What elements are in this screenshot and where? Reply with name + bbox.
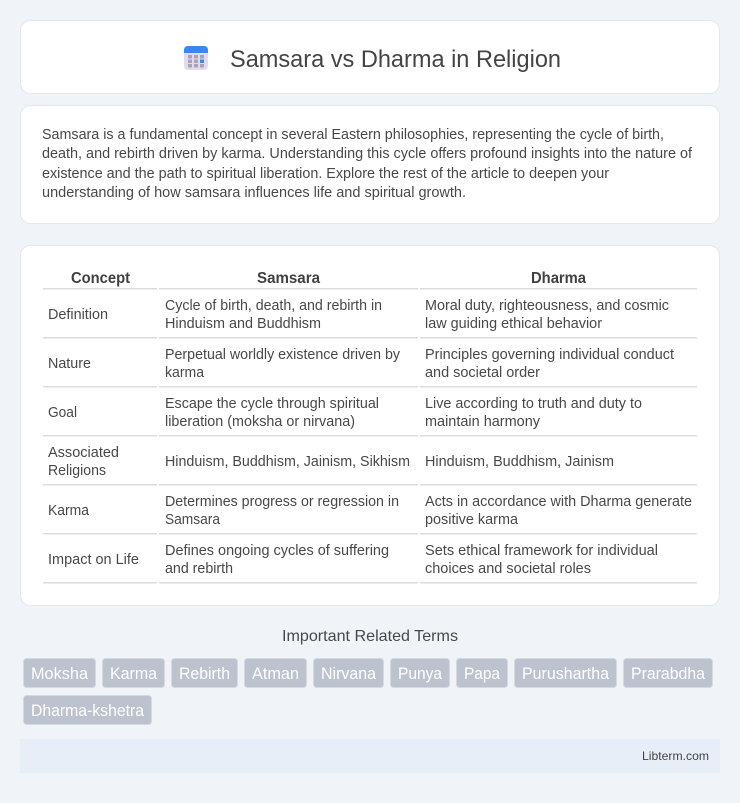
chip: Rebirth: Rebirth (179, 665, 230, 683)
chip: Papa: Papa (464, 665, 501, 683)
chip: Purushartha: Purushartha (522, 665, 610, 683)
chip: Dharma-kshetra (24, 696, 152, 724)
chip: Moksha: Moksha (31, 665, 89, 683)
table row: Definition: Hinduism and Buddhism (165, 316, 321, 332)
table row: Nature: Principles governing individual conduct (425, 347, 674, 363)
related terms chips (24, 658, 712, 724)
table row: Impact on Life: Defines ongoing cycles of suffering (165, 543, 389, 559)
table row: Goal (43, 396, 697, 436)
table row: Definition: Moral duty, righteousness, and cosmic (425, 298, 669, 314)
table header row: Concept (71, 270, 130, 287)
table row: Karma: Karma (48, 503, 89, 519)
chip: Moksha (24, 658, 96, 688)
table row: Definition: Cycle of birth, death, and rebirth in (165, 298, 382, 314)
chip: Punya (390, 658, 450, 688)
table header row (43, 270, 697, 290)
icon: calendar (184, 46, 208, 70)
table row: Karma: Determines progress or regression in (165, 494, 399, 510)
table row: Goal: maintain harmony (425, 414, 541, 430)
table row: Nature: Perpetual worldly existence driven by (165, 347, 401, 363)
table row: Goal: Escape the cycle through spiritual (165, 396, 379, 412)
chip: Punya: Punya (398, 665, 443, 683)
table row: Definition: law guiding ethical behavior (425, 316, 602, 332)
text block: introduction (42, 127, 693, 201)
table row: Definition (43, 298, 697, 338)
title: Samsara vs Dharma in Religion (230, 46, 561, 73)
table row: Goal: Goal (48, 405, 77, 421)
chip: Atman: Atman (252, 665, 299, 683)
chip: Prarabdha: Prarabdha (631, 665, 706, 683)
text block: introduction: understanding of how samsara influences life and spiritual growth. (42, 185, 466, 201)
table row: Associated Religions: Associated (48, 445, 119, 461)
chip: Papa (456, 658, 508, 688)
heading: Important Related Terms: Important Related Terms (282, 628, 458, 645)
table row: Karma (43, 494, 697, 534)
text block: introduction: death, and rebirth driven by karma. Understanding this cycle offers profound insights into the nature of (42, 146, 693, 162)
table row: Nature: Nature (48, 356, 91, 372)
panel: introduction (20, 106, 720, 224)
table row: Nature (43, 347, 697, 388)
table row: Karma: positive karma (425, 512, 518, 528)
table row: Impact on Life: Sets ethical framework for individual (425, 543, 658, 559)
footer (20, 739, 720, 773)
table row: Nature: and societal order (425, 365, 540, 381)
table row: Impact on Life: Impact on Life (48, 552, 139, 568)
table row: Impact on Life (43, 543, 697, 584)
table row: Associated Religions: Religions (48, 463, 106, 479)
chip: Purushartha (514, 658, 616, 688)
table row: Karma: Samsara (165, 512, 220, 528)
table row: Associated Religions: Hinduism, Buddhism, Jainism (425, 454, 614, 470)
table row: Impact on Life: and rebirth (165, 561, 233, 577)
chip: Nirvana: Nirvana (321, 665, 377, 683)
text block: introduction: Samsara is a fundamental concept in several Eastern philosophies, representing the cycle of birth, (42, 127, 664, 143)
table header row: Samsara (257, 270, 320, 287)
table row: Associated Religions: Hinduism, Buddhism, Jainism, Sikhism (165, 454, 410, 470)
table row: Associated Religions (43, 445, 697, 486)
chip: Nirvana (314, 658, 384, 688)
panel: comparison table (20, 246, 720, 606)
table row: Karma: Acts in accordance with Dharma generate (425, 494, 692, 510)
chip: Karma: Karma (110, 665, 158, 683)
table row: Definition: Definition (48, 307, 108, 323)
text block: introduction: existence and the path to spiritual liberation. Explore the rest of the article to deepen your (42, 166, 609, 182)
footer: Libterm.com (642, 749, 709, 763)
table row: Goal: Live according to truth and duty to (425, 396, 642, 412)
table header row: Dharma (531, 270, 586, 287)
table row: Nature: karma (165, 365, 204, 381)
chip: Atman (244, 658, 306, 688)
chip: Rebirth (172, 658, 238, 688)
chip: Karma (102, 658, 164, 688)
chip: Prarabdha (624, 658, 712, 688)
chip: Dharma-kshetra: Dharma-kshetra (31, 702, 145, 720)
table row: Goal: liberation (moksha or nirvana) (165, 414, 355, 430)
panel: header (20, 20, 720, 94)
table row: Impact on Life: choices and societal roles (425, 561, 591, 577)
